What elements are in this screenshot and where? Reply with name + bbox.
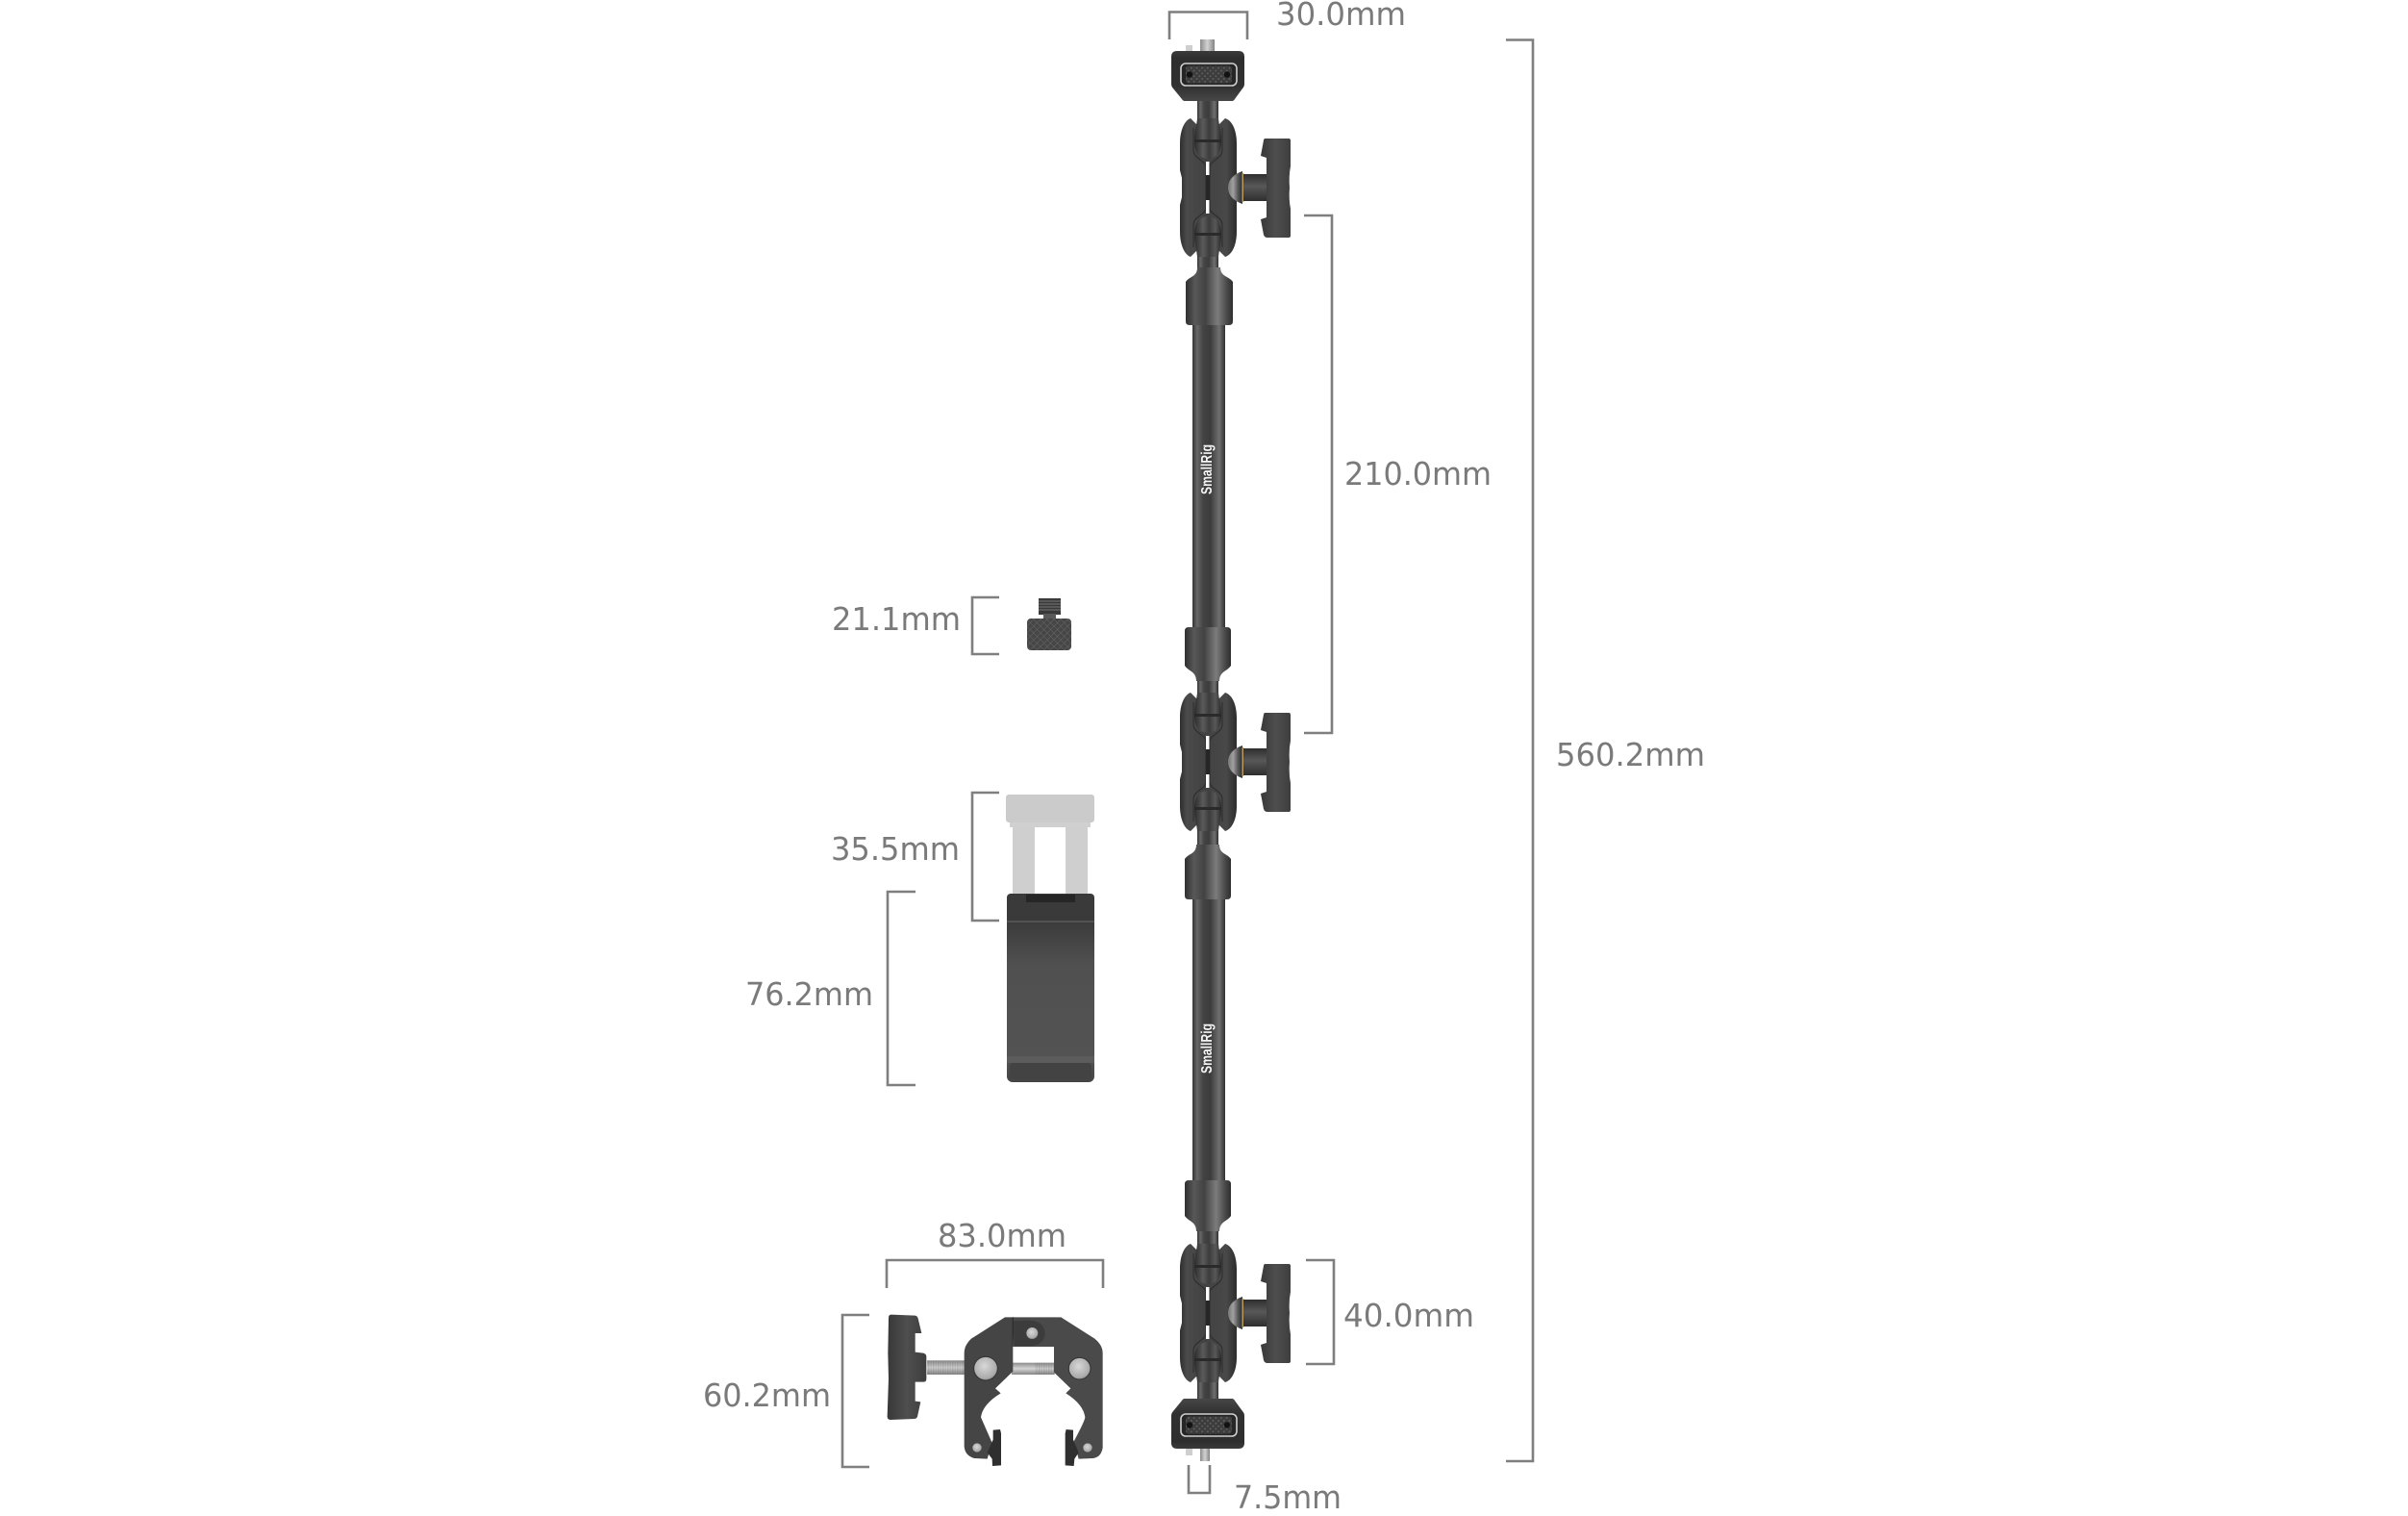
dimension: 35.5mm xyxy=(831,793,999,921)
dimension: 83.0mm xyxy=(887,1217,1103,1288)
dimension: 76.2mm: 76.2mm xyxy=(745,975,873,1013)
adapter screw xyxy=(1027,598,1071,650)
rod: lower with SmallRig logo xyxy=(1192,893,1225,1186)
dimension: 40.0mm xyxy=(1306,1260,1474,1364)
dimension: 7.5mm xyxy=(1189,1465,1342,1516)
clamp knob xyxy=(888,1315,926,1420)
dimension: 40.0mm: 40.0mm xyxy=(1343,1297,1474,1334)
dimension: 83.0mm: 83.0mm xyxy=(938,1217,1066,1254)
dimension: 76.2mm xyxy=(745,892,916,1085)
dimension: 35.5mm: 35.5mm xyxy=(831,830,960,868)
dimension: 60.2mm xyxy=(703,1315,869,1467)
clamp pads xyxy=(988,1429,1079,1466)
dimension: 21.1mm: 21.1mm xyxy=(832,600,961,638)
phone holder xyxy=(1006,795,1094,1082)
dimension: 560.2mm: 560.2mm xyxy=(1556,736,1705,773)
clamp hinge and rivets xyxy=(972,1317,1092,1453)
extended clamp top (ghosted) xyxy=(1006,795,1094,897)
holder body xyxy=(1007,894,1094,1082)
main extension arm assembly xyxy=(1171,39,1291,1461)
rod: upper with SmallRig logo xyxy=(1192,317,1225,635)
collars on rods xyxy=(1185,267,1233,1231)
quick release plate: bottom xyxy=(1171,1399,1244,1461)
dimension: 30.0mm xyxy=(1169,0,1406,39)
rod: upper with SmallRig logo: SmallRig xyxy=(1199,444,1216,494)
dimension: 7.5mm: 7.5mm xyxy=(1234,1478,1342,1516)
dimension: 21.1mm xyxy=(832,597,999,654)
dimension: 210.0mm xyxy=(1304,215,1492,733)
dimension: 560.2mm xyxy=(1506,40,1705,1461)
dimension: 210.0mm: 210.0mm xyxy=(1344,455,1492,493)
clamp right jaw xyxy=(1013,1317,1103,1459)
clamp left jaw xyxy=(965,1317,1013,1459)
ball head arm: bottom xyxy=(1180,1219,1291,1407)
super clamp xyxy=(888,1315,1103,1466)
quick release plate: top xyxy=(1171,39,1244,101)
dimension: 60.2mm: 60.2mm xyxy=(703,1377,831,1414)
ball head arm: top xyxy=(1180,93,1291,282)
ball head arm: middle xyxy=(1180,668,1291,856)
clamp thread xyxy=(927,1360,1055,1375)
rod: lower with SmallRig logo: SmallRig xyxy=(1199,1023,1216,1074)
